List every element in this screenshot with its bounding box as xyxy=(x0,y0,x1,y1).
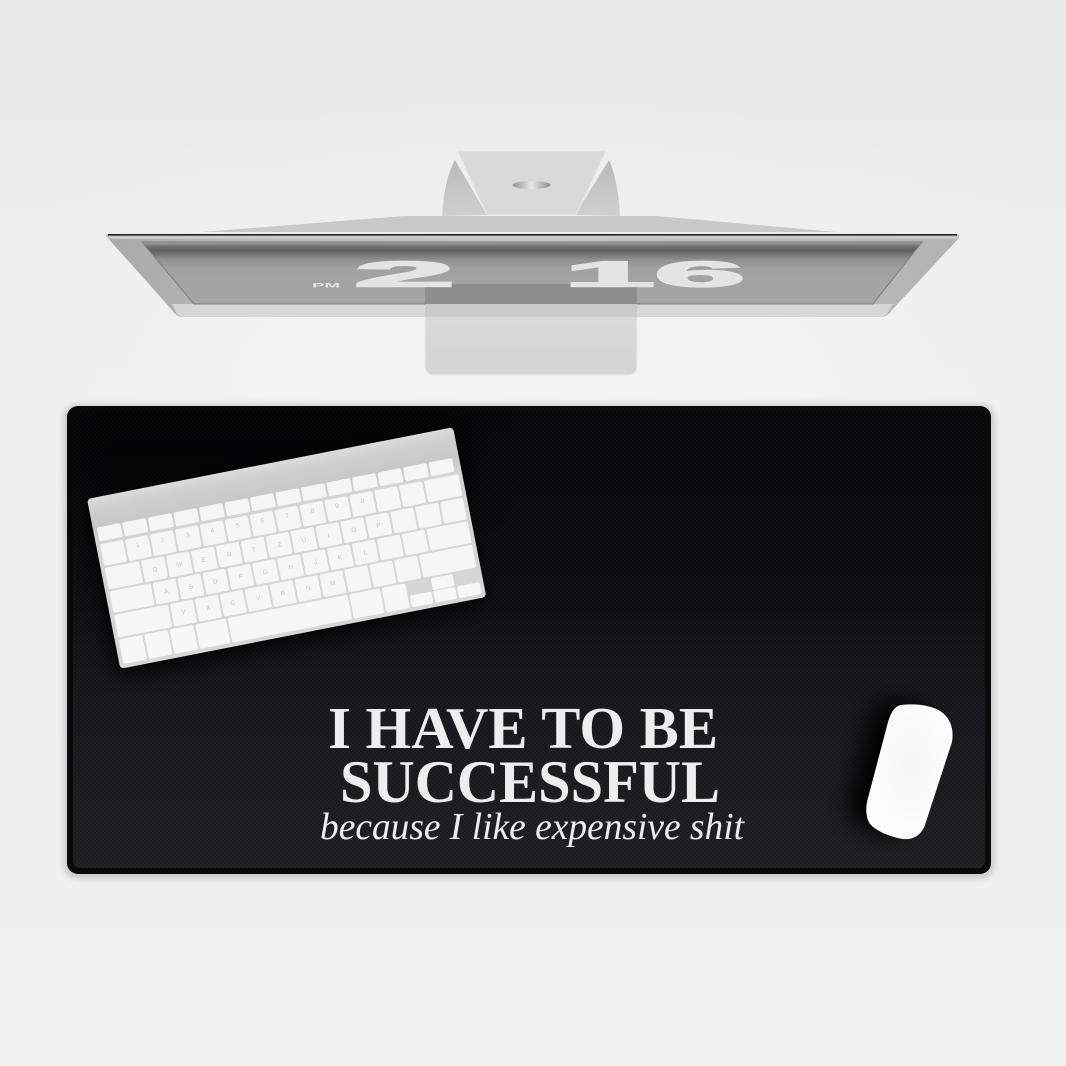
function key row xyxy=(97,458,455,541)
ASDF key row: L xyxy=(363,549,368,557)
ASDF key row: S xyxy=(188,583,194,591)
YXCV key row: B xyxy=(280,590,286,597)
QWERTZ key row: P xyxy=(376,522,381,530)
number key row: 8 xyxy=(310,507,315,515)
lower lip of the monitor xyxy=(172,304,893,317)
ASDF key row: G xyxy=(262,569,269,576)
ASDF key row: F xyxy=(238,574,244,581)
number key row: 2 xyxy=(160,537,165,545)
QWERTZ key row: U xyxy=(301,537,307,544)
ASDF key row: D xyxy=(212,578,219,586)
keyboard xyxy=(87,427,486,669)
slogan script line: because I like expensive shit xyxy=(320,806,745,848)
QWERTZ key row: E xyxy=(201,556,207,564)
QWERTZ key row: T xyxy=(251,546,257,554)
slogan text xyxy=(320,695,745,848)
monitor stand foot xyxy=(425,300,637,375)
clock text: PM xyxy=(312,282,340,290)
desk mat xyxy=(67,406,991,874)
foot reflection xyxy=(425,284,637,304)
clock text xyxy=(312,254,745,294)
QWERTZ key row: R xyxy=(226,551,233,559)
bottom key row with space bar and arrows xyxy=(119,569,482,664)
YXCV key row: C xyxy=(230,599,236,607)
ASDF key row: A xyxy=(164,588,170,596)
monitor back wedge xyxy=(202,216,836,232)
YXCV key row: N xyxy=(305,585,312,592)
mouse xyxy=(866,704,953,839)
number key row: 1 xyxy=(135,542,141,549)
YXCV key row: V xyxy=(256,594,262,602)
clock text: 16 xyxy=(564,254,745,294)
ASDF key row: H xyxy=(288,564,294,571)
ASDF key row: K xyxy=(337,554,344,562)
number key row: 5 xyxy=(236,522,241,530)
monitor stand arm xyxy=(442,151,620,216)
number key row: 3 xyxy=(186,532,191,540)
QWERTZ key row: W xyxy=(176,561,184,569)
YXCV key row: M xyxy=(330,580,336,588)
monitor with flip clock screen xyxy=(106,151,959,375)
number key row: 0 xyxy=(360,498,365,505)
number key row: 4 xyxy=(210,527,215,535)
ASDF key row xyxy=(109,521,472,613)
QWERTZ key row: Z xyxy=(277,541,282,549)
QWERTZ key row xyxy=(105,498,467,589)
ASDF key row: J xyxy=(313,559,318,566)
QWERTZ key row: O xyxy=(351,527,357,535)
monitor body xyxy=(106,234,959,317)
soft shadows on the mat xyxy=(73,410,935,835)
QWERTZ key row: I xyxy=(327,532,330,539)
number key row xyxy=(100,474,462,566)
YXCV key row xyxy=(114,545,476,638)
number key row: 6 xyxy=(260,517,265,525)
number key row: 9 xyxy=(335,503,340,510)
stand hole xyxy=(512,181,550,189)
clock text: 2 xyxy=(354,254,455,294)
YXCV key row: Y xyxy=(181,609,187,617)
monitor screen xyxy=(142,242,922,304)
slogan heading line 1: I HAVE TO BE xyxy=(328,695,718,761)
YXCV key row: X xyxy=(205,604,212,612)
QWERTZ key row: Q xyxy=(152,566,158,574)
slogan heading line 2: SUCCESSFUL xyxy=(340,749,720,815)
number key row: 7 xyxy=(285,512,290,520)
